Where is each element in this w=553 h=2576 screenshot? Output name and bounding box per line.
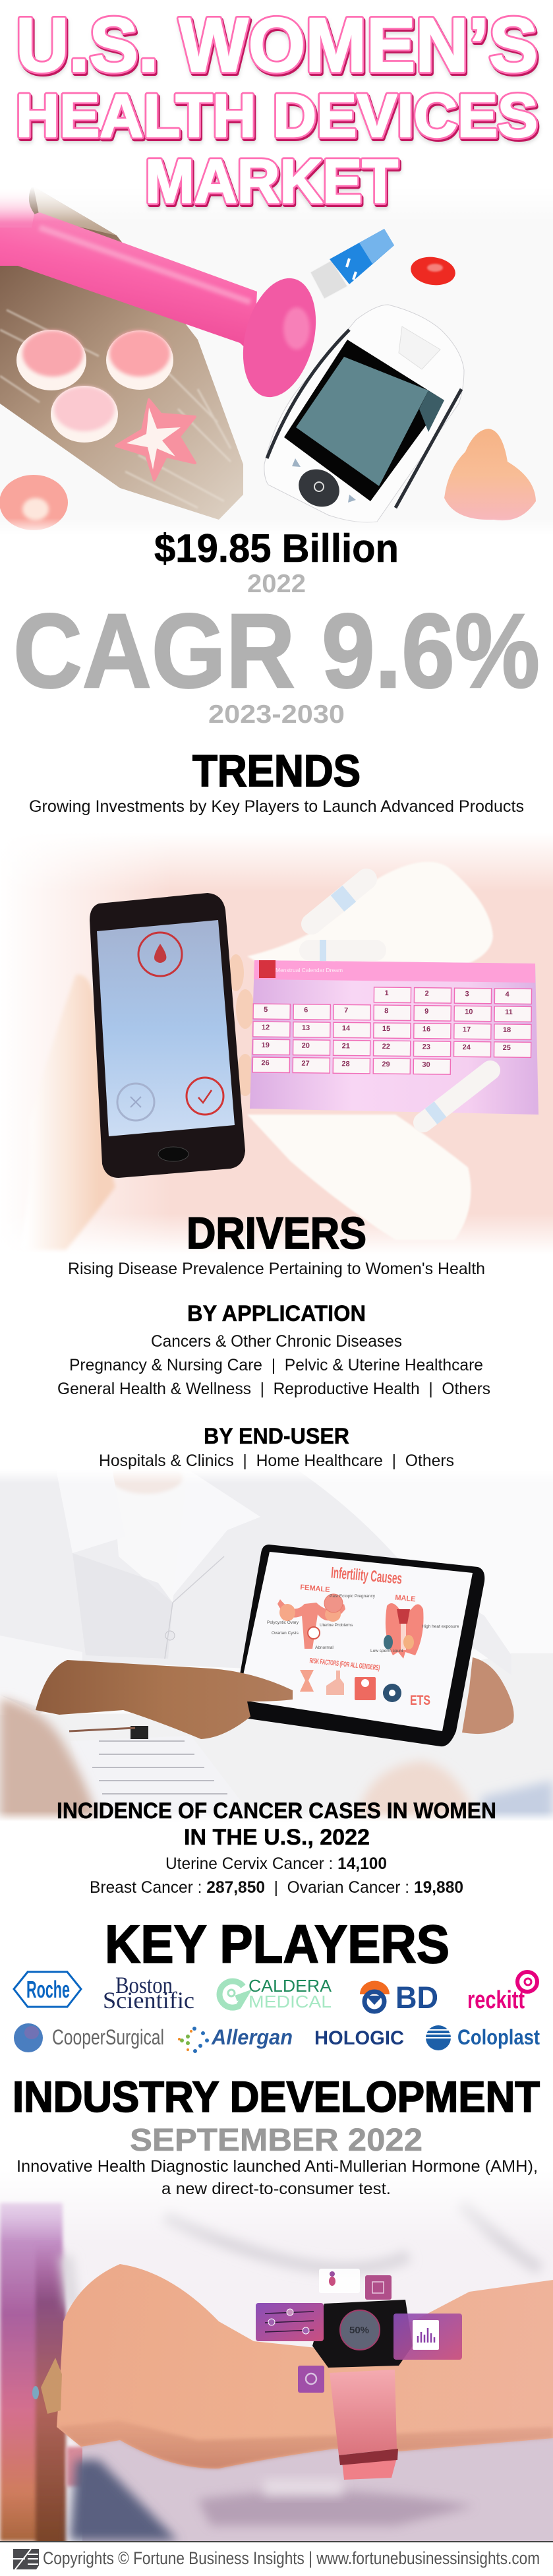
- application list: Cancers & Other Chronic Diseases: [151, 1332, 402, 1351]
- female anatomy illustration: Abnormal: [315, 1645, 334, 1650]
- watch band: [330, 2370, 398, 2480]
- sanitary pads: [247, 862, 493, 1240]
- menstrual calendar: 4: [505, 991, 510, 998]
- menstrual calendar: [250, 960, 538, 1115]
- glucose meter: [264, 305, 464, 522]
- menstrual calendar: 8: [384, 1007, 388, 1015]
- menstrual calendar: 21: [342, 1042, 350, 1051]
- pointing hand: [36, 1660, 293, 1739]
- logo: BD: [360, 1980, 438, 2015]
- smartwatch image: [0, 2170, 553, 2546]
- footer bar: [0, 2541, 553, 2576]
- menstrual calendar: 30: [422, 1061, 430, 1069]
- test strip: [310, 229, 394, 299]
- smartphone: [90, 893, 245, 1178]
- watch face: 50%: [349, 2325, 369, 2336]
- doctor coat: [0, 1461, 511, 1715]
- shirt lower: [82, 2434, 553, 2541]
- development description: a new direct-to-consumer test.: [161, 2180, 391, 2198]
- ring on hand: [32, 2358, 62, 2414]
- logo: Allergan: Allergan: [211, 2025, 293, 2049]
- doctor with tablet image: [0, 1461, 553, 1827]
- watch face: [312, 2300, 413, 2368]
- menstrual calendar: 25: [503, 1044, 511, 1052]
- check card: [365, 2275, 392, 2300]
- screen buttons: [138, 933, 182, 976]
- cancer statistics: Uterine Cervix Cancer : 14,100: [165, 1855, 387, 1873]
- menstrual calendar: 27: [301, 1060, 310, 1068]
- phone fingers: [228, 954, 254, 1096]
- tablet: [235, 1545, 484, 1746]
- logo: Boston Scientific: [103, 1972, 194, 2013]
- tablet gender labels: FEMALE: [300, 1583, 330, 1594]
- cancer incidence heading: [57, 1798, 496, 1850]
- title extrusion: U.S. WOMEN’S: [17, 4, 539, 90]
- title fill: HEALTH DEVICES: [16, 82, 538, 150]
- risk factors label: RISK FACTORS (FOR ALL GENDERS): [309, 1657, 380, 1672]
- risk factor icons: [300, 1670, 430, 1708]
- title fill: U.S. WOMEN’S: [16, 2, 538, 88]
- menstrual calendar: 9: [424, 1008, 428, 1016]
- development description: [16, 2157, 538, 2198]
- logo: Allergan: [178, 2025, 293, 2053]
- gear card: [298, 2366, 324, 2393]
- title outline: HEALTH DEVICES: [16, 82, 538, 150]
- menstrual calendar: 17: [463, 1026, 471, 1033]
- female anatomy illustration: Polycystic Ovary: [267, 1620, 299, 1625]
- male anatomy illustration: Low sperm count: [370, 1649, 403, 1653]
- trends image: phone, pads and calendar: [0, 832, 553, 1254]
- menstrual calendar: 1: [384, 989, 389, 997]
- drivers text: Rising Disease Prevalence Pertaining to Women's Health: [68, 1260, 485, 1278]
- logo: reckitt: [467, 1972, 537, 2014]
- title fill: MARKET: [145, 146, 398, 216]
- logo: CooperSurgical: [14, 2023, 164, 2052]
- hand holding phone: [20, 975, 115, 1250]
- development description: Innovative Health Diagnostic launched Anti-Mullerian Hormone (AMH),: [16, 2157, 538, 2176]
- title extrusion: MARKET: [146, 148, 399, 218]
- key players heading: KEY PLAYERS: [105, 1915, 450, 1975]
- menstrual calendar: 14: [342, 1024, 351, 1033]
- logo: Roche: [14, 1972, 81, 2007]
- menstrual calendar: 12: [262, 1024, 270, 1031]
- female anatomy illustration: [267, 1594, 376, 1650]
- trends heading: TRENDS: [192, 746, 361, 796]
- menstrual calendar: 26: [261, 1059, 270, 1067]
- female anatomy illustration: Ovarian Cysts: [272, 1631, 299, 1636]
- cancer incidence heading: IN THE U.S., 2022: [184, 1825, 370, 1850]
- menstrual calendar: 10: [465, 1008, 473, 1016]
- drivers heading: DRIVERS: [187, 1208, 366, 1258]
- risk factor icons: ETS: [410, 1693, 430, 1708]
- logo: Caldera Medical: CALDERA: [248, 1976, 332, 1996]
- logo: reckitt: reckitt: [467, 1986, 525, 2014]
- logo: Coloplast: Coloplast: [457, 2025, 540, 2049]
- arm: [57, 2264, 553, 2469]
- tablet gender labels: [301, 1584, 415, 1601]
- female anatomy illustration: Past Ectopic Pregnancy: [330, 1594, 376, 1599]
- cancer statistics: Breast Cancer : 287,850 | Ovarian Cancer : 19,880: [90, 1878, 463, 1897]
- menstrual calendar: 15: [382, 1025, 390, 1033]
- title fill: [16, 2, 538, 216]
- female anatomy illustration: Uterine Problems: [320, 1623, 353, 1628]
- blurred patient foreground: [0, 1698, 553, 1827]
- logo: Hologic: HOLOGIC: [314, 2027, 404, 2049]
- Fortune Business Insights logo: [13, 2549, 39, 2569]
- menstrual calendar: 5: [264, 1006, 268, 1014]
- title shadow: MARKET: [146, 150, 399, 220]
- logo: Roche: Roche: [26, 1976, 70, 2003]
- title extrusion: HEALTH DEVICES: [17, 84, 539, 152]
- menstrual calendar: 6: [304, 1006, 308, 1014]
- red candy: [411, 257, 455, 285]
- menstrual calendar: Menstrual Calendar Dream: [276, 967, 343, 973]
- profile card: [319, 2269, 360, 2293]
- slider card: [256, 2303, 324, 2341]
- title outline: [16, 2, 538, 216]
- application list: [57, 1332, 490, 1398]
- menstrual calendar: 23: [422, 1043, 430, 1051]
- title outline: U.S. WOMEN’S: [16, 2, 538, 88]
- heart candy: [444, 429, 536, 520]
- menstrual calendar: 18: [503, 1026, 511, 1034]
- tampons: [310, 879, 376, 950]
- by end-user heading: BY END-USER: [204, 1424, 349, 1449]
- menstrual calendar: 3: [465, 990, 469, 998]
- logo: Caldera Medical: [219, 1976, 332, 2011]
- menstrual calendar: 11: [505, 1008, 513, 1016]
- menstrual calendar: 20: [302, 1042, 310, 1050]
- title shadow: HEALTH DEVICES: [17, 86, 539, 154]
- male anatomy illustration: [370, 1603, 459, 1659]
- logo: Coloplast: [426, 2025, 540, 2050]
- shirt folds: [66, 2203, 540, 2308]
- cancer incidence heading: INCIDENCE OF CANCER CASES IN WOMEN: [57, 1798, 496, 1824]
- dumbbell: [0, 187, 328, 405]
- logo: Caldera Medical: MEDICAL: [248, 1992, 332, 2011]
- tablet gender labels: MALE: [395, 1594, 416, 1603]
- menstrual calendar: 28: [341, 1060, 350, 1068]
- menstrual calendar: 22: [382, 1043, 390, 1051]
- menstrual calendar: 19: [262, 1041, 270, 1049]
- hero image: dumbbell, candies and glucose meter: [0, 187, 553, 536]
- left purple strip: [0, 2203, 89, 2546]
- cancer statistics: [90, 1855, 463, 1897]
- menstrual calendar: 16: [422, 1026, 430, 1033]
- application list: Pregnancy & Nursing Care | Pelvic & Uterine Healthcare: [69, 1356, 483, 1374]
- year 2022: 2022: [247, 570, 306, 598]
- logo: Boston Scientific: Scientific: [103, 1987, 194, 2013]
- logo: BD: BD: [395, 1980, 438, 2015]
- title outline: MARKET: [145, 146, 398, 216]
- title extrusion: [17, 4, 539, 218]
- title shadow: U.S. WOMEN’S: [17, 6, 539, 92]
- market size value: $19.85 Billion: [154, 526, 399, 570]
- menstrual calendar: 2: [424, 990, 429, 998]
- clipboard papers: [69, 1726, 227, 1794]
- trends text: Growing Investments by Key Players to Launch Advanced Products: [29, 797, 524, 816]
- forecast period: 2023-2030: [208, 700, 345, 729]
- chart card: [393, 2314, 462, 2360]
- menstrual calendar: 24: [463, 1043, 471, 1051]
- table: [49, 1653, 553, 1811]
- menstrual calendar: 29: [382, 1060, 390, 1068]
- tablet heading: Infertility Causes: [330, 1564, 403, 1588]
- development date: SEPTEMBER 2022: [130, 2123, 422, 2158]
- wooden board: [0, 187, 243, 520]
- title: [16, 2, 539, 220]
- menstrual calendar: 7: [344, 1006, 348, 1014]
- tablet hand right: [462, 1657, 514, 1734]
- menstrual calendar: 13: [302, 1024, 310, 1032]
- application list: General Health & Wellness | Reproductive Health | Others: [57, 1380, 490, 1398]
- tampon on calendar: [423, 1070, 490, 1122]
- logo: Boston Scientific: Boston: [115, 1972, 173, 1998]
- by application heading: BY APPLICATION: [187, 1301, 366, 1326]
- end-user list: Hospitals & Clinics | Home Healthcare | Others: [99, 1452, 454, 1470]
- candies: [0, 330, 195, 530]
- logo: CooperSurgical: CooperSurgical: [52, 2025, 164, 2049]
- title shadow: [17, 6, 539, 220]
- male anatomy illustration: High heat exposure: [422, 1624, 459, 1629]
